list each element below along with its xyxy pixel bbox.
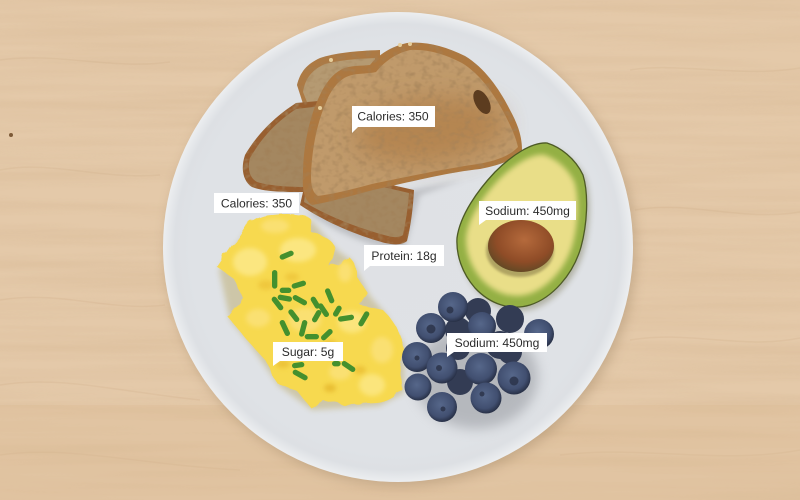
label: Sodium 450mg on avocado <box>479 201 576 225</box>
label: Calories 350 beside toast: Calories: 350 <box>221 196 292 210</box>
label: Sodium 450mg on blueberries <box>447 333 547 357</box>
berry calyx marks <box>414 306 518 412</box>
back toast slice <box>297 50 380 102</box>
scrambled eggs <box>217 214 405 410</box>
label: Sodium 450mg on avocado: Sodium: 450mg <box>485 204 570 218</box>
label: Calories 350 beside toast <box>214 193 299 213</box>
front berries <box>402 292 554 422</box>
label: Protein 18g: Protein: 18g <box>371 249 437 263</box>
toast slices <box>240 40 525 250</box>
avocado pit <box>486 220 554 277</box>
label: Calories 350 on toast: Calories: 350 <box>357 110 429 124</box>
label: Protein 18g <box>364 245 444 271</box>
label: Calories 350 on toast <box>352 106 435 133</box>
label: Sodium 450mg on blueberries: Sodium: 450mg <box>455 336 539 350</box>
egg highlights and shadows <box>233 219 393 396</box>
blueberries <box>402 292 554 429</box>
front toast slice <box>300 40 525 208</box>
avocado half <box>457 143 590 311</box>
back berries <box>445 298 524 395</box>
chives <box>274 253 367 378</box>
label: Sugar 5g: Sugar: 5g <box>282 345 334 359</box>
label: Sugar 5g <box>273 342 343 366</box>
left toast slice <box>242 101 414 244</box>
plate <box>163 12 636 486</box>
